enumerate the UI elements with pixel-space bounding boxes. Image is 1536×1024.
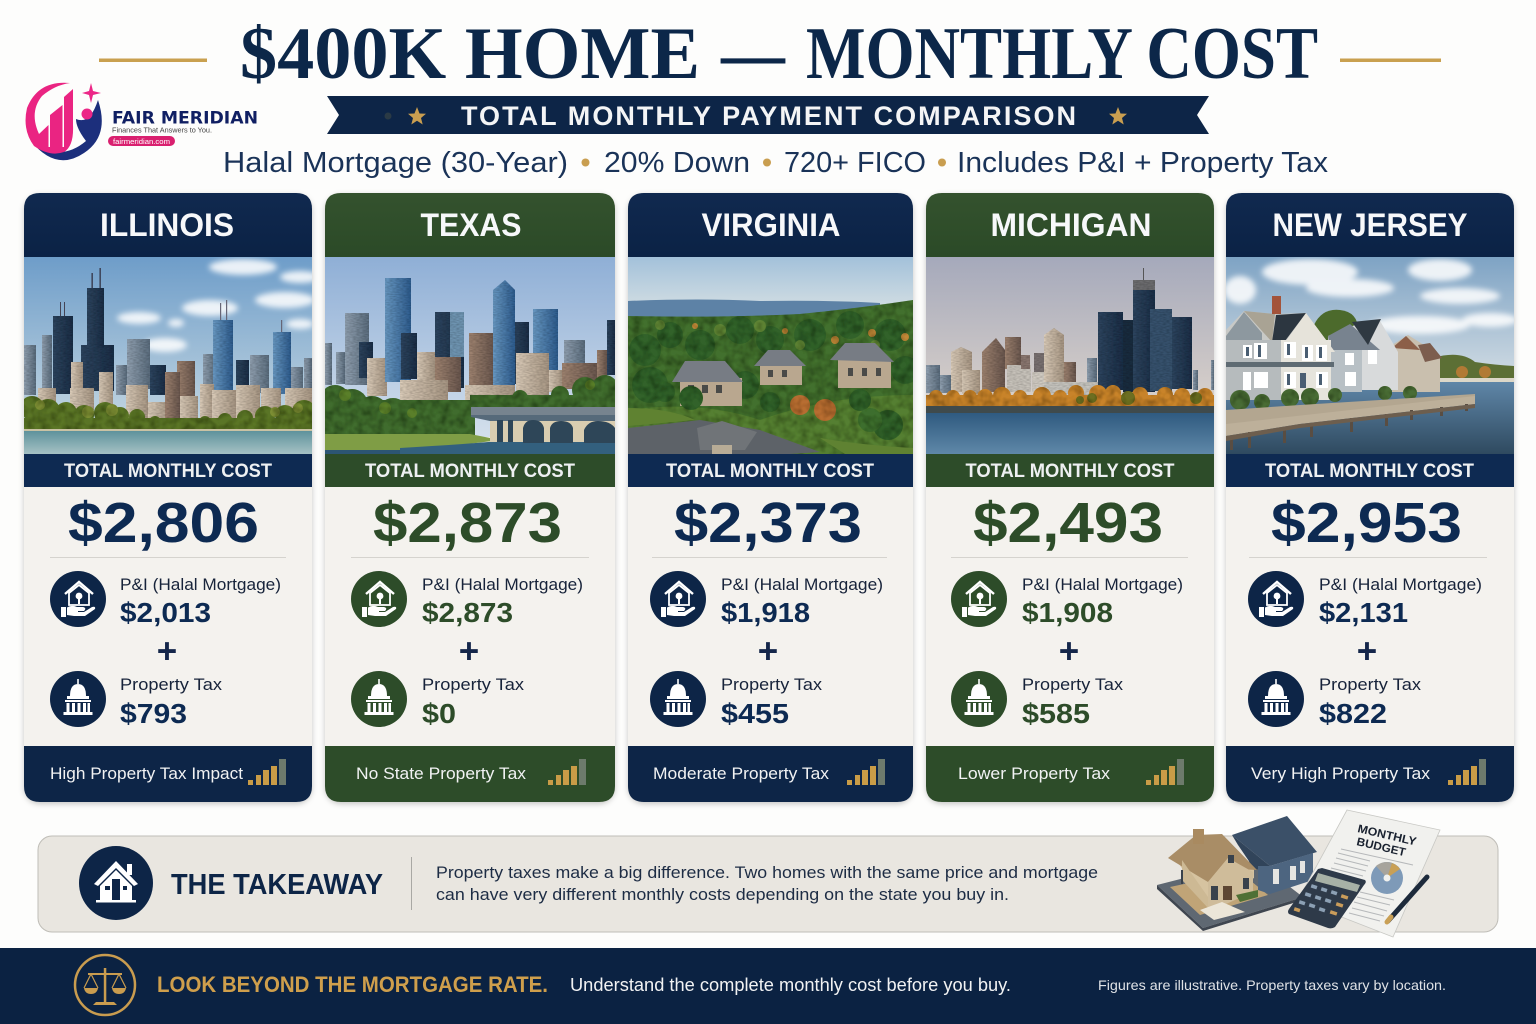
icon: house xyxy=(79,846,153,920)
footer: High Property Tax Impact xyxy=(24,746,312,802)
footer: Moderate Property Tax xyxy=(628,746,913,802)
header: Virginia: VIRGINIA xyxy=(702,207,840,243)
property tax xyxy=(120,675,223,729)
P&I: $1,918 xyxy=(721,597,810,628)
P&I: $2,873 xyxy=(422,597,513,628)
subtitle xyxy=(223,147,1329,179)
footer: High Property Tax Impact: High Property Tax Impact xyxy=(50,764,243,783)
header: New Jersey: NEW JERSEY xyxy=(1272,207,1468,243)
logo: Fair Meridian: fairmeridian.com xyxy=(113,139,170,146)
illustration: houses, budget sheet, calculator, pen: BUDGET xyxy=(1355,836,1407,859)
card body xyxy=(926,193,1214,802)
plus: + xyxy=(758,632,778,671)
property tax: $793 xyxy=(120,698,187,729)
icon: scales of justice xyxy=(75,955,135,1015)
photo: Texas skyline with bridge xyxy=(320,257,618,454)
card body xyxy=(24,193,312,802)
P&I xyxy=(1319,575,1482,628)
title: — xyxy=(720,13,786,95)
photo: Virginia hills and houses xyxy=(628,257,919,454)
title xyxy=(99,13,1441,95)
panel: Virginia xyxy=(628,193,919,802)
bottom banner xyxy=(0,948,1536,1024)
band: total monthly cost: TOTAL MONTHLY COST xyxy=(1265,461,1474,482)
panel: the takeaway xyxy=(38,810,1498,937)
icon: hand holding house xyxy=(1248,571,1304,627)
panel: Michigan xyxy=(926,193,1214,802)
P&I: P&I (Halal Mortgage) xyxy=(120,575,281,594)
header: Virginia xyxy=(628,193,913,257)
total: $2,373 xyxy=(674,491,862,555)
P&I: P&I (Halal Mortgage) xyxy=(721,575,883,594)
icon: hand holding house xyxy=(50,571,106,627)
title: MONTHLY COST xyxy=(806,13,1318,95)
total: $2,953 xyxy=(1271,491,1462,555)
logo: Fair Meridian: Finances That Answers to You. xyxy=(112,126,212,134)
panel: Texas xyxy=(320,193,618,802)
property tax: $455 xyxy=(721,698,789,729)
P&I xyxy=(422,575,583,628)
subtitle: Includes P&I + Property Tax xyxy=(957,147,1329,179)
subtitle: 20% Down xyxy=(604,147,750,179)
illustration: houses, budget sheet, calculator, pen: MONTHLY xyxy=(1356,823,1418,848)
footer: Very High Property Tax xyxy=(1226,746,1514,802)
takeaway text: Property taxes make a big difference. Two homes with the same price and mortgage xyxy=(436,863,1098,882)
icon: hand holding house xyxy=(650,571,706,627)
P&I xyxy=(721,575,883,628)
heading: THE TAKEAWAY xyxy=(171,869,383,901)
photo: Chicago skyline over lake xyxy=(20,257,320,454)
icon: capitol dome xyxy=(50,671,106,727)
property tax xyxy=(422,675,525,729)
header: Michigan: MICHIGAN xyxy=(990,207,1152,243)
P&I: P&I (Halal Mortgage) xyxy=(1022,575,1183,594)
footer: Lower Property Tax xyxy=(926,746,1214,802)
band: total monthly cost: TOTAL MONTHLY COST xyxy=(966,461,1175,482)
footer: Moderate Property Tax: Moderate Property Tax xyxy=(653,764,830,783)
header: Texas: TEXAS xyxy=(420,207,522,243)
icon: capitol dome xyxy=(951,671,1007,727)
photo: Detroit skyline over river xyxy=(926,257,1214,454)
property tax: Property Tax xyxy=(1022,675,1124,694)
total: $2,493 xyxy=(973,491,1163,555)
card body xyxy=(325,193,615,802)
header: Illinois: ILLINOIS xyxy=(100,207,234,243)
property tax: $585 xyxy=(1022,698,1090,729)
property tax: $0 xyxy=(422,698,456,729)
property tax xyxy=(721,675,823,729)
supporting text: Understand the complete monthly cost before you buy. xyxy=(570,975,1011,995)
icon: capitol dome xyxy=(650,671,706,727)
footer: Lower Property Tax: Lower Property Tax xyxy=(958,764,1111,783)
footer: No State Property Tax: No State Property Tax xyxy=(356,764,527,783)
P&I: $2,131 xyxy=(1319,597,1408,628)
title: $400K HOME xyxy=(240,13,700,95)
plus: + xyxy=(459,632,479,671)
P&I xyxy=(1022,575,1183,628)
header: Illinois xyxy=(24,193,312,257)
illustration: houses, budget sheet, calculator, pen xyxy=(1157,810,1440,937)
card body xyxy=(1226,193,1514,802)
ribbon heading xyxy=(327,96,1209,134)
band: total monthly cost: TOTAL MONTHLY COST xyxy=(64,461,272,482)
logo: Fair Meridian xyxy=(26,83,258,160)
property tax xyxy=(1319,675,1422,729)
P&I xyxy=(120,575,281,628)
takeaway text: can have very different monthly costs depending on the state you buy in. xyxy=(436,885,1009,904)
band: total monthly cost: TOTAL MONTHLY COST xyxy=(365,461,575,482)
panel: Illinois xyxy=(20,193,320,802)
property tax: Property Tax xyxy=(422,675,525,694)
P&I: $2,013 xyxy=(120,597,211,628)
disclaimer: Figures are illustrative. Property taxes vary by location. xyxy=(1098,977,1446,993)
header: New Jersey xyxy=(1226,193,1514,257)
footer: No State Property Tax xyxy=(325,746,615,802)
P&I: $1,908 xyxy=(1022,597,1113,628)
takeaway text xyxy=(436,863,1098,904)
plus: + xyxy=(1059,632,1079,671)
logo: Fair Meridian: FAIR MERIDIAN xyxy=(112,108,258,128)
property tax xyxy=(1022,675,1124,729)
band: total monthly cost xyxy=(628,454,913,487)
icon: hand holding house xyxy=(351,571,407,627)
icon: capitol dome xyxy=(351,671,407,727)
header: Texas xyxy=(325,193,615,257)
band: total monthly cost xyxy=(24,454,312,487)
total: $2,873 xyxy=(373,491,562,555)
band: total monthly cost xyxy=(325,454,615,487)
total: $2,806 xyxy=(68,491,259,555)
subtitle: Halal Mortgage (30-Year) xyxy=(223,147,568,179)
property tax: Property Tax xyxy=(721,675,823,694)
subtitle: 720+ FICO xyxy=(784,147,926,179)
property tax: $822 xyxy=(1319,698,1387,729)
band: total monthly cost xyxy=(926,454,1214,487)
header: Michigan xyxy=(926,193,1214,257)
icon: hand holding house xyxy=(951,571,1007,627)
property tax: Property Tax xyxy=(1319,675,1422,694)
icon: capitol dome xyxy=(1248,671,1304,727)
photo: New Jersey shore houses and boardwalk xyxy=(1224,257,1518,454)
plus: + xyxy=(157,632,177,671)
call to action: LOOK BEYOND THE MORTGAGE RATE. xyxy=(157,972,548,997)
band: total monthly cost: TOTAL MONTHLY COST xyxy=(666,461,874,482)
panel: New Jersey xyxy=(1224,193,1518,802)
property tax: Property Tax xyxy=(120,675,223,694)
P&I: P&I (Halal Mortgage) xyxy=(1319,575,1482,594)
ribbon heading: TOTAL MONTHLY PAYMENT COMPARISON xyxy=(461,101,1076,131)
footer: Very High Property Tax: Very High Property Tax xyxy=(1251,764,1431,783)
band: total monthly cost xyxy=(1226,454,1514,487)
plus: + xyxy=(1357,632,1377,671)
card body xyxy=(628,193,913,802)
P&I: P&I (Halal Mortgage) xyxy=(422,575,583,594)
